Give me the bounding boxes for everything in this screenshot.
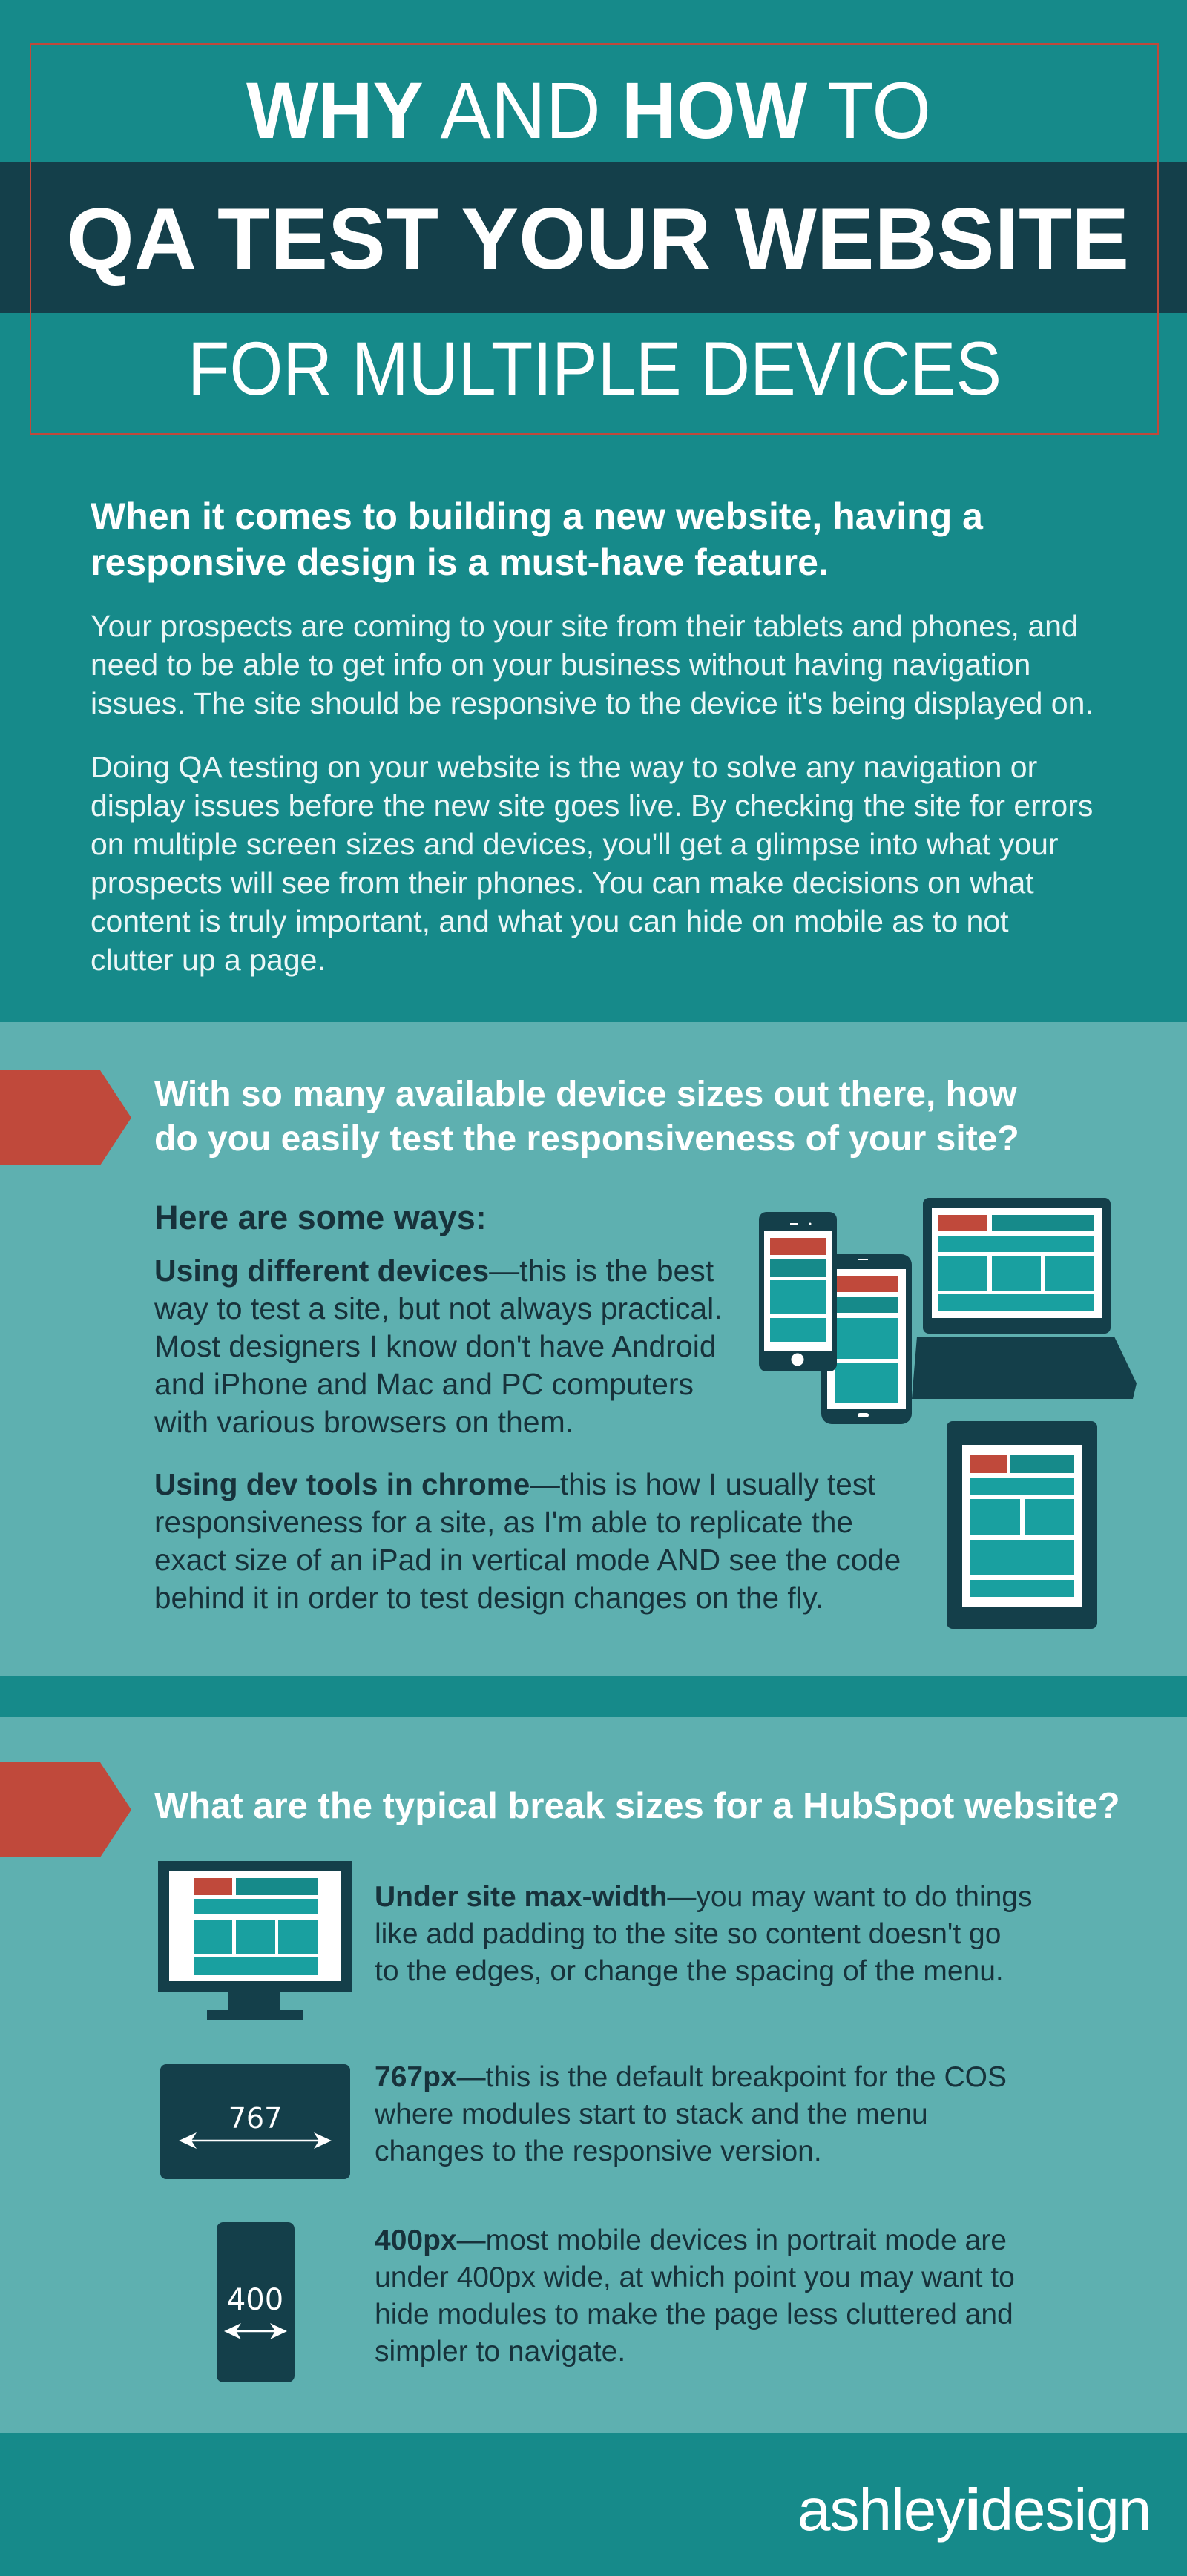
title block: FOR MULTIPLE DEVICES [188,326,1002,411]
text: 400px: hide modules to make the page less cluttered and [375,2299,1013,2330]
text: different devices: and iPhone and Mac and PC computers [154,1367,694,1401]
divider band [0,1676,1187,1717]
text: 400px: 400px—most mobile devices in portrait mode are [375,2224,1007,2256]
text: 767px: changes to the responsive version. [375,2135,822,2167]
phone 2 [821,1254,912,1424]
text: 767px: 767px—this is the default breakpoint for the COS [375,2061,1007,2093]
tablet [947,1421,1097,1629]
intro paragraphs: Your prospects are coming to your site from their tablets and phones, and [91,609,1079,643]
text: 767px [375,2061,1007,2167]
phone 1 [759,1212,837,1371]
intro paragraphs: clutter up a page. [91,943,326,977]
intro paragraphs: on multiple screen sizes and devices, you'll get a glimpse into what your [91,827,1059,861]
400 box [217,2222,295,2382]
intro paragraphs: issues. The site should be responsive to the device it's being displayed on. [91,686,1094,720]
text: 400px: under 400px wide, at which point you may want to [375,2262,1015,2293]
title block [0,43,1187,435]
section heading: What are the typical break sizes for a HubSpot website? [154,1786,1120,1826]
text: dev tools: responsiveness for a site, as I'm able to replicate the [154,1505,853,1539]
icon: devices group [759,1198,1137,1629]
icon: breakpoint graphics: 400 [227,2283,283,2317]
intro heading: When it comes to building a new website, having a [91,495,983,537]
arrow marker [0,1762,131,1857]
text: max-width: like add padding to the site so content doesn't go [375,1918,1001,1950]
767 box [160,2064,350,2179]
text: max-width: to the edges, or change the spacing of the menu. [375,1955,1004,1987]
laptop [923,1198,1111,1334]
intro paragraphs: Doing QA testing on your website is the way to solve any navigation or [91,750,1037,784]
intro paragraphs: prospects will see from their phones. You can make decisions on what [91,866,1034,900]
icon: breakpoint graphics: 767 [228,2102,282,2135]
intro paragraphs: content is truly important, and what you can hide on mobile as to not [91,904,1009,938]
subheading: Here are some ways: [154,1199,487,1236]
section heading [154,1075,1019,1159]
text: different devices: Most designers I know don't have Android [154,1329,717,1363]
title block: WHY AND HOW TO [246,65,931,155]
text: different devices: with various browsers on them. [154,1405,573,1439]
title block: QA TEST YOUR WEBSITE [67,190,1129,287]
section heading: do you easily test the responsiveness of your site? [154,1119,1019,1159]
text: dev tools: Using dev tools in chrome—this is how I usually test [154,1467,875,1501]
intro heading [91,495,984,583]
footer [0,2433,1187,2576]
text: different devices: Using different devices—this is the best [154,1254,714,1288]
text: dev tools: exact size of an iPad in vertical mode AND see the code [154,1543,901,1577]
section: header [0,0,1187,1022]
text: 400px: simpler to navigate. [375,2336,625,2368]
intro paragraphs: display issues before the new site goes live. By checking the site for errors [91,788,1093,823]
arrow marker [0,1070,131,1165]
text: different devices [154,1254,723,1439]
text: 767px: where modules start to stack and the menu [375,2098,928,2130]
intro heading: responsive design is a must-have feature. [91,541,829,583]
logo: ashleyidesign [798,2477,1151,2543]
intro paragraphs: need to be able to get info on your business without having navigation [91,648,1030,682]
intro paragraphs [91,609,1094,977]
text: different devices: way to test a site, but not always practical. [154,1291,723,1325]
section heading: With so many available device sizes out there, how [154,1075,1017,1114]
monitor [158,1861,352,1992]
text: max-width: Under site max-width—you may want to do things [375,1881,1033,1913]
text: dev tools [154,1467,901,1615]
section: break sizes [0,1717,1187,2433]
icon: breakpoint graphics [158,1861,352,2382]
text: 400px [375,2224,1015,2368]
section: how to test [0,1022,1187,1676]
text: dev tools: behind it in order to test design changes on the fly. [154,1581,823,1615]
text: max-width [375,1881,1033,1987]
